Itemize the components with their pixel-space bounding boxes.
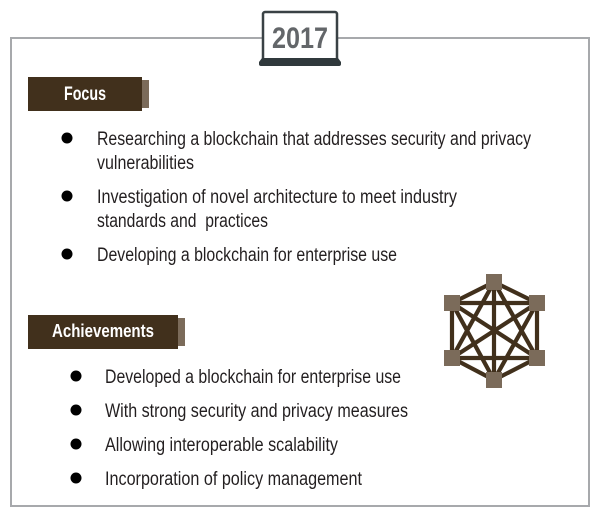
list: achievement items [70,367,408,490]
icon: blockchain network [444,274,545,388]
list: focus items: Investigation of novel architecture to meet industry [97,187,457,208]
heading: Focus [28,77,149,111]
list: focus items: Developing a blockchain for enterprise use [97,245,397,266]
icon: laptop with year [259,12,341,66]
list: focus items [62,129,531,266]
heading: Achievements: Achievements [52,321,154,341]
heading: Focus: Focus [64,84,106,105]
list: achievement items: Allowing interoperable scalability [105,435,338,456]
list: focus items: vulnerabilities [97,153,194,174]
list: achievement items: Incorporation of policy management [105,469,363,490]
list: focus items: standards and practices [97,211,268,232]
list: achievement items: With strong security and privacy measures [105,401,408,422]
heading: Achievements [28,315,185,349]
year label: 2017 [272,22,328,55]
list: achievement items: Developed a blockchain for enterprise use [105,367,401,388]
